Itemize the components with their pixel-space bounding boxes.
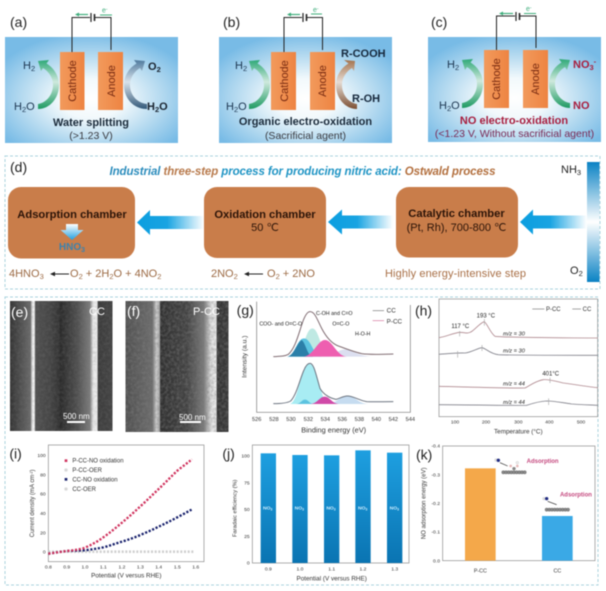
curve: CC m/z 44 bbox=[439, 401, 598, 405]
species labels b: 2 bbox=[234, 105, 238, 114]
x tick labels g: 540 bbox=[372, 417, 381, 423]
bar labels NO3-: NO bbox=[326, 505, 334, 511]
x tick labels k: CC bbox=[553, 568, 561, 574]
panel: (i) current density chart bbox=[9, 445, 204, 580]
species labels a: 2 bbox=[31, 64, 35, 73]
cell background b bbox=[219, 37, 392, 143]
electron arrows c: e bbox=[526, 6, 530, 13]
species labels a: H bbox=[23, 60, 31, 72]
x tick labels j bbox=[265, 567, 398, 573]
equation: oxidation: + 2NO bbox=[280, 268, 315, 280]
legend h: CC bbox=[583, 307, 592, 313]
x tick labels h: 100 bbox=[451, 420, 459, 426]
scale bar f: 500 nm bbox=[179, 413, 206, 422]
equation: oxidation bbox=[211, 268, 315, 281]
x tick labels j: 1.0 bbox=[297, 567, 304, 573]
equation: adsorption: 2 bbox=[79, 272, 83, 281]
cell background a bbox=[5, 37, 178, 143]
note: energy-intensive step: Highly energy-intensive step bbox=[385, 268, 526, 280]
heading d: Industrial three-step process for producing nitric acid: Ostwald process bbox=[110, 166, 496, 178]
electrode: anode b: Anode bbox=[317, 65, 329, 97]
x tick labels i: 1.1 bbox=[100, 565, 107, 571]
legend h: P-CC bbox=[546, 307, 561, 313]
bar labels NO3-: 3 bbox=[270, 508, 272, 512]
bars j bbox=[261, 450, 402, 563]
peak labels h bbox=[451, 314, 560, 378]
icon: NO adsorption on P-CC bbox=[494, 458, 526, 474]
axes g bbox=[257, 302, 410, 412]
curve: CC m/z 30 bbox=[439, 348, 598, 355]
species labels a: 2 bbox=[22, 105, 26, 114]
top spectrum fills bbox=[287, 328, 374, 357]
equation: oxidation: O bbox=[267, 268, 276, 280]
caption c: NO electro-oxidation bbox=[460, 115, 568, 127]
y tick labels k: -0.1 bbox=[431, 530, 440, 536]
peak labels g: O=C-O bbox=[332, 322, 349, 328]
equation: oxidation: 2NO bbox=[211, 268, 234, 280]
species labels b: R-OH bbox=[352, 93, 380, 105]
electron arrows c: - bbox=[530, 5, 532, 11]
x tick labels j: 1.2 bbox=[360, 567, 367, 573]
caption c: (<1.23 V, Without sacrificial agent) bbox=[435, 128, 594, 140]
panel label j: (j) bbox=[222, 446, 235, 462]
dashed frame d bbox=[5, 156, 600, 289]
y axis title i: Current density (mA cm bbox=[30, 475, 36, 537]
peak markers h bbox=[458, 319, 550, 405]
electrode: anode c bbox=[523, 50, 548, 108]
species labels c: O bbox=[451, 100, 460, 112]
y tick labels j: 0 bbox=[247, 561, 250, 567]
legend h bbox=[532, 307, 592, 313]
electrode: anode b bbox=[310, 52, 335, 110]
top spectrum envelope bbox=[273, 312, 393, 357]
x tick labels k: P-CC bbox=[474, 568, 487, 574]
electron arrows a bbox=[75, 6, 112, 16]
SEM image f bbox=[126, 301, 228, 432]
bar: P-CC bbox=[465, 468, 496, 561]
species labels a: O bbox=[148, 61, 157, 73]
series: P-CC-NO oxidation bbox=[48, 459, 192, 554]
species labels c: 2 bbox=[447, 104, 451, 113]
equation: adsorption: 2 bbox=[157, 272, 161, 281]
panel label d: (d) bbox=[10, 159, 27, 175]
peak labels h: 193 °C bbox=[477, 314, 496, 320]
series: CC-NO oxidation bbox=[48, 509, 192, 554]
species labels b: H bbox=[235, 60, 243, 72]
electron arrows b: - bbox=[317, 6, 319, 12]
bar labels NO3-: 3 bbox=[334, 508, 336, 512]
x axis title i: Potential (V versus RHE) bbox=[91, 573, 162, 580]
electron arrows b bbox=[287, 6, 322, 16]
x tick labels i: 1.2 bbox=[119, 565, 126, 571]
species labels b: O bbox=[238, 101, 247, 113]
x tick labels g: 538 bbox=[355, 417, 364, 423]
y tick labels j bbox=[241, 454, 250, 567]
electrode: anode a: Anode bbox=[106, 65, 118, 97]
species labels c: NO bbox=[573, 100, 590, 112]
x tick labels h: 400 bbox=[545, 420, 554, 426]
y axis title i: -2 bbox=[29, 471, 33, 475]
caption b bbox=[239, 116, 372, 142]
y axis title j: Faradaic efficiency (%) bbox=[232, 480, 238, 537]
legend i bbox=[64, 459, 124, 493]
y tick labels k bbox=[431, 444, 440, 564]
caption a bbox=[53, 117, 129, 142]
x tick labels h: 500 bbox=[577, 420, 585, 426]
box: catalytic chamber: Catalytic chamber bbox=[408, 208, 505, 220]
bar: CC bbox=[542, 516, 573, 561]
caption b: Organic electro-oxidation bbox=[239, 116, 372, 128]
panel: (j) Faradaic efficiency chart bbox=[222, 445, 409, 582]
arrow: catalytic to oxidation bbox=[328, 210, 393, 234]
bottom spectrum fills bbox=[289, 364, 369, 404]
species labels c: - bbox=[594, 57, 597, 66]
y tick labels j: 25 bbox=[244, 534, 250, 540]
x tick labels h: 200 bbox=[482, 420, 490, 426]
arrow: oxidation to adsorption bbox=[137, 210, 204, 235]
label: adsorption P-CC: Adsorption bbox=[527, 459, 559, 465]
electrode: cathode b: Cathode bbox=[279, 60, 291, 102]
equation: adsorption bbox=[9, 268, 161, 281]
scale bar e: 500 nm bbox=[63, 412, 90, 421]
y tick labels i: 80 bbox=[40, 472, 46, 478]
legend g: CC bbox=[387, 308, 396, 315]
y tick labels k: -0.3 bbox=[431, 472, 440, 478]
legend i: P-CC-OER bbox=[72, 468, 103, 474]
electrode: anode a bbox=[98, 52, 123, 110]
circuit wire and battery a bbox=[72, 13, 111, 52]
x tick labels i: 1.4 bbox=[155, 565, 162, 571]
x tick labels g bbox=[252, 417, 415, 423]
arrow: R-OH to R-COOH b bbox=[336, 60, 357, 109]
species labels a: O bbox=[26, 101, 35, 113]
panel: (k) NO adsorption energy chart bbox=[416, 444, 595, 574]
x tick labels i: 1.3 bbox=[137, 565, 144, 571]
circuit wire and battery c bbox=[496, 12, 536, 50]
species labels c: H bbox=[439, 100, 447, 112]
x tick labels h: 300 bbox=[514, 420, 523, 426]
x axis title g: Binding energy (eV) bbox=[301, 426, 366, 435]
x tick labels h bbox=[451, 420, 585, 426]
legend g: P-CC bbox=[387, 318, 403, 325]
legend i: CC-OER bbox=[72, 487, 97, 493]
panel label k: (k) bbox=[416, 446, 432, 462]
species labels b: R-COOH bbox=[341, 48, 386, 60]
label: adsorption CC: Adsorption bbox=[560, 492, 592, 498]
sample label CC: CC bbox=[89, 306, 105, 318]
caption a: Water splitting bbox=[53, 117, 129, 129]
y tick labels k: -0.2 bbox=[431, 501, 440, 507]
arrow: H2O to O2 a bbox=[124, 60, 147, 109]
frame j bbox=[252, 445, 409, 563]
bar labels NO3-: 3 bbox=[365, 508, 367, 512]
box: catalytic chamber: (Pt, Rh), 700-800 ℃ bbox=[407, 222, 506, 234]
panel: (b) organic electro-oxidation bbox=[219, 6, 392, 143]
panel: (c) NO electro-oxidation bbox=[428, 5, 601, 142]
box: oxidation chamber: 50 ℃ bbox=[251, 222, 279, 234]
arrow: H2O to H2 b bbox=[249, 60, 270, 109]
sample label P-CC: P-CC bbox=[193, 306, 220, 318]
frame i bbox=[48, 445, 204, 562]
x tick labels g: 544 bbox=[406, 417, 415, 423]
box: catalytic chamber bbox=[396, 187, 518, 258]
peak labels h: 401°C bbox=[542, 372, 560, 378]
bottom spectrum envelope bbox=[273, 363, 393, 404]
panel label b: (b) bbox=[223, 14, 240, 30]
caption a: (>1.23 V) bbox=[69, 130, 113, 142]
O2 label: O bbox=[570, 265, 579, 277]
species labels c: NO bbox=[573, 59, 590, 71]
panel label h: (h) bbox=[415, 303, 432, 319]
NH3 label: 3 bbox=[577, 168, 581, 177]
y tick labels j: 50 bbox=[244, 507, 250, 513]
bar labels NO3-: NO bbox=[263, 505, 270, 511]
curve: P-CC m/z 30 bbox=[439, 322, 598, 338]
cell background c bbox=[428, 37, 601, 142]
gradient bar: NH3 / O2 feed bbox=[587, 162, 600, 282]
box: adsorption chamber bbox=[8, 187, 135, 258]
legend i: CC-NO oxidation bbox=[72, 477, 118, 483]
species labels a: H bbox=[147, 101, 155, 113]
NH3 label: NH bbox=[561, 164, 577, 176]
panel: (d) Ostwald process bbox=[5, 156, 600, 289]
electrode: cathode a: Cathode bbox=[67, 60, 79, 102]
texture f bbox=[126, 301, 228, 432]
box: oxidation chamber bbox=[204, 187, 326, 258]
electron arrows c bbox=[499, 5, 536, 16]
panel: (f) SEM of P-CC bbox=[126, 301, 228, 432]
y tick labels i bbox=[37, 453, 46, 556]
panel label i: (i) bbox=[9, 446, 22, 462]
bar labels NO3-: NO bbox=[390, 505, 397, 511]
species labels c: 3 bbox=[590, 63, 594, 72]
bar labels NO3-: 3 bbox=[302, 508, 304, 512]
peak labels g bbox=[259, 311, 371, 338]
electron arrows a: - bbox=[106, 6, 108, 12]
equation: adsorption: 4HNO bbox=[9, 268, 40, 280]
O2 label: 2 bbox=[579, 269, 583, 278]
texture e bbox=[10, 301, 112, 431]
species labels a: O bbox=[159, 101, 168, 113]
series: OER flat traces bbox=[48, 548, 193, 556]
y tick labels k: -0.4 bbox=[431, 444, 440, 450]
y tick labels j: 100 bbox=[241, 454, 250, 460]
electrode: anode c: Anode bbox=[530, 63, 542, 95]
electrode: cathode c: Cathode bbox=[491, 58, 503, 100]
panel label e: (e) bbox=[11, 304, 28, 320]
x tick labels k bbox=[474, 568, 561, 574]
icon: down arrow to HNO3 bbox=[60, 224, 84, 240]
icon: NO adsorption on CC bbox=[542, 497, 570, 511]
x tick labels g: 532 bbox=[304, 417, 313, 423]
panel: (a) water splitting bbox=[5, 6, 178, 143]
x axis title j: Potential (V versus RHE) bbox=[296, 575, 367, 582]
equation: adsorption: 2 bbox=[109, 272, 114, 281]
x tick labels j: 0.9 bbox=[265, 567, 272, 573]
peak labels g: H-O-H bbox=[355, 332, 371, 338]
electrode: cathode b bbox=[271, 52, 296, 110]
m/z labels h: m/z = 30 bbox=[503, 349, 526, 355]
x tick labels j: 1.3 bbox=[391, 567, 398, 573]
y axis title i: ) bbox=[30, 469, 36, 471]
x tick labels j: 1.1 bbox=[328, 567, 335, 573]
m/z labels h: m/z = 44 bbox=[503, 381, 525, 387]
bar labels NO3- bbox=[263, 505, 399, 512]
frame k bbox=[443, 446, 595, 561]
m/z labels h: m/z = 30 bbox=[503, 331, 526, 337]
peak labels h: 117 °C bbox=[451, 324, 470, 330]
frame h bbox=[439, 299, 598, 417]
x tick labels i: 0.9 bbox=[63, 565, 70, 571]
arrow: NO to NO3- c bbox=[549, 59, 570, 108]
y axis title k: NO adsorption energy (eV) bbox=[422, 468, 428, 539]
box: adsorption chamber: Adsorption chamber bbox=[17, 209, 127, 221]
arrow: H2O to H2 a bbox=[38, 60, 59, 109]
x tick labels g: 530 bbox=[286, 417, 296, 423]
HNO3 label: 3 bbox=[81, 247, 85, 254]
x tick labels i: 1.6 bbox=[192, 565, 199, 571]
equation: adsorption: O bbox=[70, 268, 79, 280]
y tick labels i: 40 bbox=[40, 511, 46, 517]
x axis title h: Temperature (°C) bbox=[494, 428, 543, 436]
peak labels g: COO- and O=C-O bbox=[259, 322, 302, 328]
electron arrows b: e bbox=[313, 7, 317, 14]
caption b: (Sacrificial agent) bbox=[265, 130, 346, 142]
arrow: H2O to H2 c bbox=[462, 59, 483, 108]
panel: (g) XPS chart bbox=[237, 302, 415, 435]
species labels a: H bbox=[14, 101, 22, 113]
HNO3 label: HNO bbox=[59, 242, 81, 253]
equation: adsorption: 3 bbox=[40, 272, 44, 281]
species labels b bbox=[226, 48, 386, 114]
panel: (e) SEM of CC bbox=[10, 301, 112, 431]
panel label g: (g) bbox=[237, 302, 254, 318]
species labels a: 2 bbox=[155, 105, 159, 114]
equation: adsorption: + 2H bbox=[83, 268, 109, 280]
panel label a: (a) bbox=[10, 14, 27, 30]
species labels c: H bbox=[447, 59, 455, 71]
y tick labels i: 100 bbox=[37, 453, 46, 459]
legend i: P-CC-NO oxidation bbox=[72, 459, 124, 465]
x tick labels g: 534 bbox=[321, 417, 330, 423]
y tick labels j: 75 bbox=[244, 480, 250, 486]
x tick labels g: 526 bbox=[252, 417, 261, 423]
y tick labels k: 0.0 bbox=[433, 558, 440, 564]
m/z labels h: m/z = 44 bbox=[503, 400, 525, 406]
legend g bbox=[373, 308, 403, 325]
panel: (h) TPD chart bbox=[415, 299, 598, 436]
species labels a: 2 bbox=[157, 65, 161, 74]
species labels c bbox=[439, 57, 597, 113]
peak labels g: C-OH and C=O bbox=[316, 311, 353, 317]
equation: oxidation: 2 bbox=[276, 272, 280, 281]
x tick labels g: 542 bbox=[389, 417, 398, 423]
y tick labels i: 0 bbox=[43, 550, 46, 556]
m/z labels h bbox=[503, 331, 526, 406]
electrode: cathode a bbox=[60, 52, 84, 110]
x tick labels i: 1.0 bbox=[82, 565, 89, 571]
circuit wire and battery b bbox=[284, 13, 322, 52]
SEM image e bbox=[10, 301, 112, 431]
x tick labels i: 1.5 bbox=[174, 565, 181, 571]
y tick labels i: 60 bbox=[40, 492, 46, 498]
y axis title g: Intensity (a.u.) bbox=[242, 336, 249, 378]
equation: oxidation: 2 bbox=[234, 272, 238, 281]
y tick labels i: 20 bbox=[40, 530, 46, 536]
electrode: cathode c bbox=[484, 50, 509, 108]
electron arrows a: e bbox=[102, 8, 106, 14]
x tick labels i bbox=[45, 565, 199, 571]
x tick labels g: 536 bbox=[338, 417, 347, 423]
x tick labels g: 528 bbox=[269, 417, 279, 423]
curve: P-CC m/z 44 bbox=[439, 380, 598, 388]
equation: adsorption: O + 4NO bbox=[114, 268, 158, 280]
x tick labels i: 0.8 bbox=[45, 565, 52, 571]
box: oxidation chamber: Oxidation chamber bbox=[214, 209, 316, 221]
species labels b: H bbox=[226, 101, 234, 113]
species labels c: 2 bbox=[455, 63, 459, 72]
caption c bbox=[435, 115, 594, 140]
bar labels NO3-: 3 bbox=[397, 508, 399, 512]
species labels b: 2 bbox=[243, 64, 247, 73]
panel label c: (c) bbox=[431, 14, 447, 30]
species labels a bbox=[14, 60, 168, 114]
dashed frame: characterization panels bbox=[5, 297, 598, 585]
arrow: feed to catalytic bbox=[520, 210, 587, 234]
bar labels NO3-: NO bbox=[358, 505, 365, 511]
panel label f: (f) bbox=[127, 303, 140, 319]
bar labels NO3-: NO bbox=[295, 505, 302, 511]
